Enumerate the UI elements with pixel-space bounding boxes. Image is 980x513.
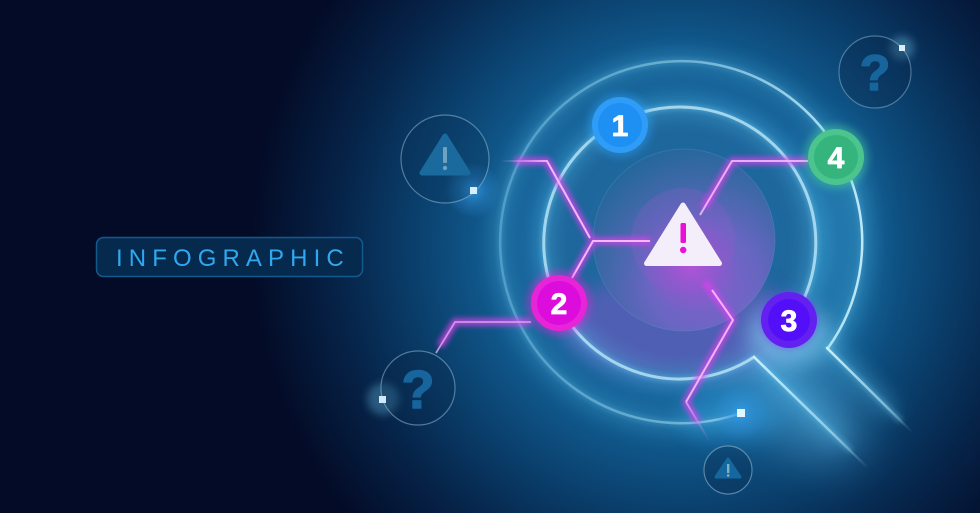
badge 2 bbox=[527, 271, 591, 335]
pink connector lines bbox=[436, 161, 808, 442]
badge 1 bbox=[588, 93, 652, 157]
badge 4 bbox=[804, 125, 868, 189]
badge 1: 1 bbox=[612, 110, 628, 143]
wide glow of rings bbox=[500, 61, 890, 440]
magnifying glass rings and handle bbox=[500, 61, 912, 468]
central lens disc bbox=[545, 108, 832, 378]
badge 3 bbox=[759, 290, 819, 350]
satellite: question circle lower left bbox=[367, 351, 455, 425]
handle right edge bbox=[827, 348, 912, 432]
small square node on outer ring bbox=[713, 385, 769, 441]
satellite: question circle upper right bbox=[839, 36, 914, 108]
tight glow of rings bbox=[500, 61, 900, 450]
satellite: warning circle bottom bbox=[704, 446, 752, 494]
satellite: warning circle upper left bbox=[401, 115, 501, 218]
satellite: question circle upper right: ? bbox=[860, 45, 890, 101]
badge 2: 2 bbox=[551, 288, 567, 321]
satellite: question circle lower left: ? bbox=[402, 360, 434, 420]
handle left edge bbox=[754, 357, 868, 468]
outer ring bbox=[500, 61, 862, 423]
badge 4: 4 bbox=[828, 142, 845, 175]
inner ring bbox=[544, 107, 816, 379]
label: INFOGRAPHIC bbox=[96, 238, 362, 276]
badge 3: 3 bbox=[781, 305, 797, 338]
label: INFOGRAPHIC: INFOGRAPHIC bbox=[116, 245, 350, 272]
central warning triangle bbox=[646, 205, 720, 264]
